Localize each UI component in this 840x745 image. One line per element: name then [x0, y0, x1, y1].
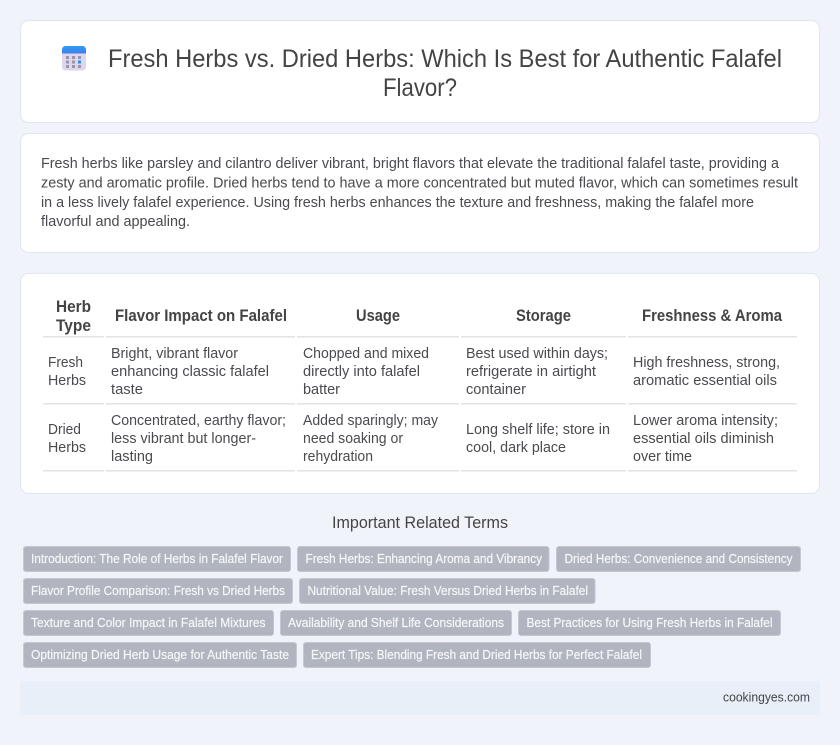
table row: dried herbs: Long shelf life; store in	[466, 421, 610, 438]
table row: dried herbs: essential oils diminish	[633, 430, 774, 447]
table header row: Usage	[356, 307, 400, 325]
table row: fresh herbs: Best used within days;	[466, 345, 608, 362]
table row: dried herbs: Added sparingly; may	[303, 412, 438, 429]
title: Fresh Herbs vs. Dried Herbs: Which Is Best for Authentic Falafel	[108, 45, 782, 73]
table row: dried herbs: lasting	[111, 448, 153, 465]
tag row 3: Best Practices for Using Fresh Herbs in Falafel	[526, 616, 772, 630]
table row: fresh herbs: aromatic essential oils	[633, 372, 777, 389]
footer	[20, 681, 820, 715]
panel: header	[20, 20, 820, 122]
table header row	[43, 298, 797, 338]
table row: dried herbs: less vibrant but longer-	[111, 430, 256, 447]
table row: dried herbs: cool, dark place	[466, 439, 566, 456]
tag row 3: Texture and Color Impact in Falafel Mixtures	[31, 616, 266, 630]
tag row 2: Nutritional Value: Fresh Versus Dried Herbs in Falafel	[308, 584, 588, 598]
table row: fresh herbs: Bright, vibrant flavor	[111, 345, 238, 362]
table row: dried herbs: Dried	[48, 421, 81, 438]
table row: fresh herbs: refrigerate in airtight	[466, 363, 597, 380]
table row: fresh herbs: batter	[303, 381, 340, 398]
tag row 1: Dried Herbs: Convenience and Consistency	[564, 552, 793, 566]
text block: introduction paragraph: Fresh herbs like parsley and cilantro deliver vibrant, bright flavors that elevate the traditional falafel taste, providing a	[41, 155, 780, 172]
tag row 4: Optimizing Dried Herb Usage for Authentic Taste	[31, 648, 289, 662]
table row: dried herbs: rehydration	[303, 448, 373, 465]
tag row 2	[24, 578, 595, 604]
text block: introduction paragraph: zesty and aromatic profile. Dried herbs tend to have a more concentrated but muted flavor, which can sometimes result	[41, 174, 799, 192]
tag row 2: Flavor Profile Comparison: Fresh vs Dried Herbs	[31, 584, 285, 598]
table header row: Storage	[516, 307, 571, 325]
table row: fresh herbs: enhancing classic falafel	[111, 363, 269, 380]
table header row: Flavor Impact on Falafel	[115, 307, 287, 325]
title: Flavor?	[383, 74, 457, 102]
table row: dried herbs: Herbs	[48, 439, 86, 456]
tag row 1	[24, 546, 800, 572]
table header row: Type	[56, 317, 91, 335]
panel: comparison table	[20, 274, 820, 494]
tag row 3: Availability and Shelf Life Considerations	[288, 616, 504, 630]
table row: fresh herbs: Herbs	[48, 372, 86, 389]
table row: dried herbs: Concentrated, earthy flavor;	[111, 412, 286, 429]
text block: introduction paragraph: in a less lively falafel experience. Using fresh herbs enhances the texture and freshness, making the falafel more	[41, 194, 754, 211]
table row: fresh herbs: High freshness, strong,	[633, 354, 780, 371]
footer source text: cookingyes.com	[723, 690, 810, 704]
table row: fresh herbs: Fresh	[48, 354, 83, 371]
table row: dried herbs: over time	[633, 448, 692, 465]
title	[108, 45, 782, 102]
table row: dried herbs	[43, 412, 797, 472]
table header row: Herb	[56, 298, 91, 316]
tag row 1: Fresh Herbs: Enhancing Aroma and Vibrancy	[306, 552, 543, 566]
table row: fresh herbs: container	[466, 381, 526, 398]
tag row 3	[24, 610, 780, 636]
table header row: Freshness & Aroma	[642, 307, 783, 325]
table row: fresh herbs: directly into falafel	[303, 363, 420, 380]
heading: important related terms: Important Related Terms	[332, 514, 508, 532]
table row: dried herbs: need soaking or	[303, 430, 403, 447]
table row: fresh herbs: Chopped and mixed	[303, 345, 429, 362]
tag row 4: Expert Tips: Blending Fresh and Dried Herbs for Perfect Falafel	[311, 648, 642, 662]
tag row 1: Introduction: The Role of Herbs in Falafel Flavor	[31, 552, 283, 566]
text block: introduction paragraph	[41, 155, 799, 230]
related term tags	[24, 546, 800, 668]
text block: introduction paragraph: flavorful and appealing.	[41, 213, 190, 230]
table row: fresh herbs: taste	[111, 381, 143, 398]
panel: introduction	[20, 134, 820, 252]
table row: fresh herbs	[43, 345, 797, 404]
tag row 4	[24, 642, 650, 668]
table row: dried herbs: Lower aroma intensity;	[633, 412, 778, 429]
icon: calendar	[62, 46, 86, 70]
